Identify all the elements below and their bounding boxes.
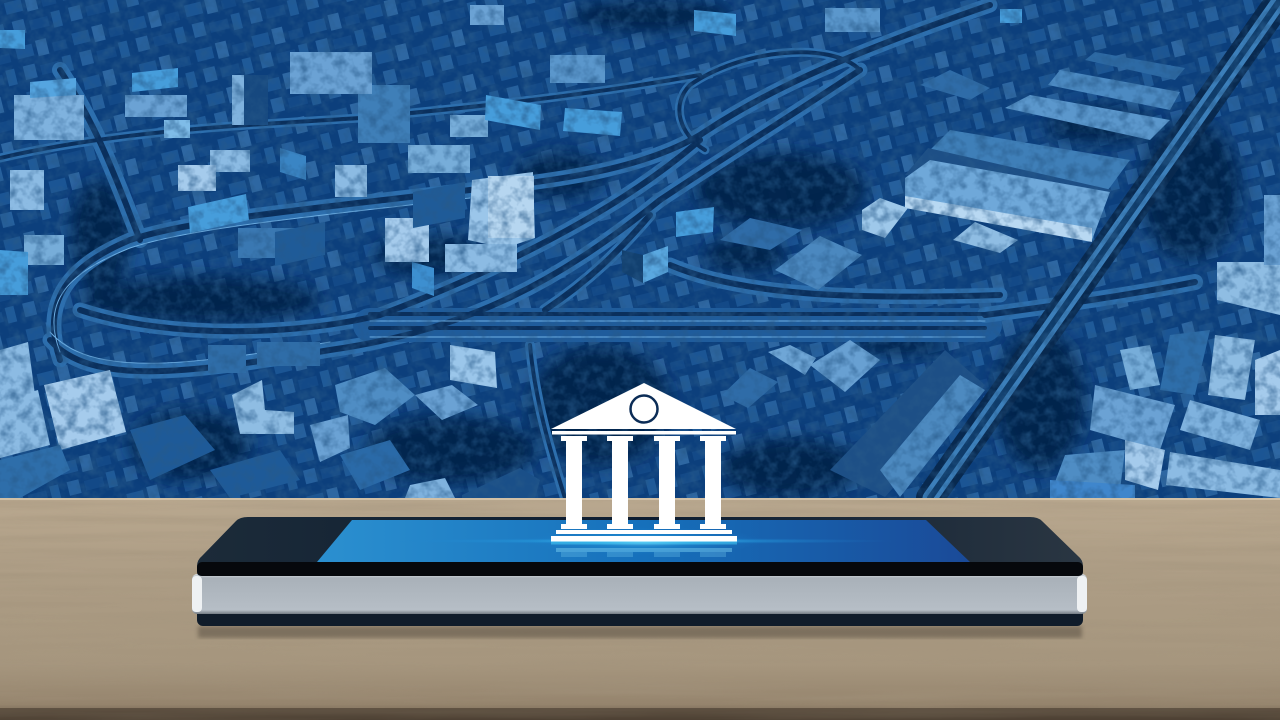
- icon base steps: [551, 530, 737, 542]
- phone silver body: [192, 574, 1087, 614]
- phone black rim: [197, 517, 1083, 576]
- icon reflection: [551, 542, 737, 557]
- billboards: [0, 9, 1022, 373]
- buildings: [0, 5, 1280, 498]
- smartphone: [192, 517, 1087, 638]
- phone reflection: [198, 626, 1082, 638]
- lane lines: [50, 5, 1195, 371]
- icon entablature: [552, 431, 736, 434]
- phone screen: [317, 520, 970, 562]
- screen glow: [394, 538, 894, 544]
- road bed: [0, 5, 1000, 498]
- icon columns: [561, 436, 726, 529]
- highway network: [0, 0, 1280, 498]
- dark tree areas: [70, 0, 1240, 498]
- icon pediment: [551, 383, 736, 429]
- city backdrop: [0, 0, 1280, 498]
- icon: bank building: [551, 383, 737, 557]
- warehouses: [720, 52, 1185, 497]
- small rooftop texture: [0, 0, 1280, 498]
- elevated rail: [930, 0, 1280, 498]
- wooden table: [0, 498, 1280, 720]
- icon medallion: [630, 396, 658, 422]
- phone underside: [197, 606, 1083, 626]
- photographic texture: [0, 0, 1280, 498]
